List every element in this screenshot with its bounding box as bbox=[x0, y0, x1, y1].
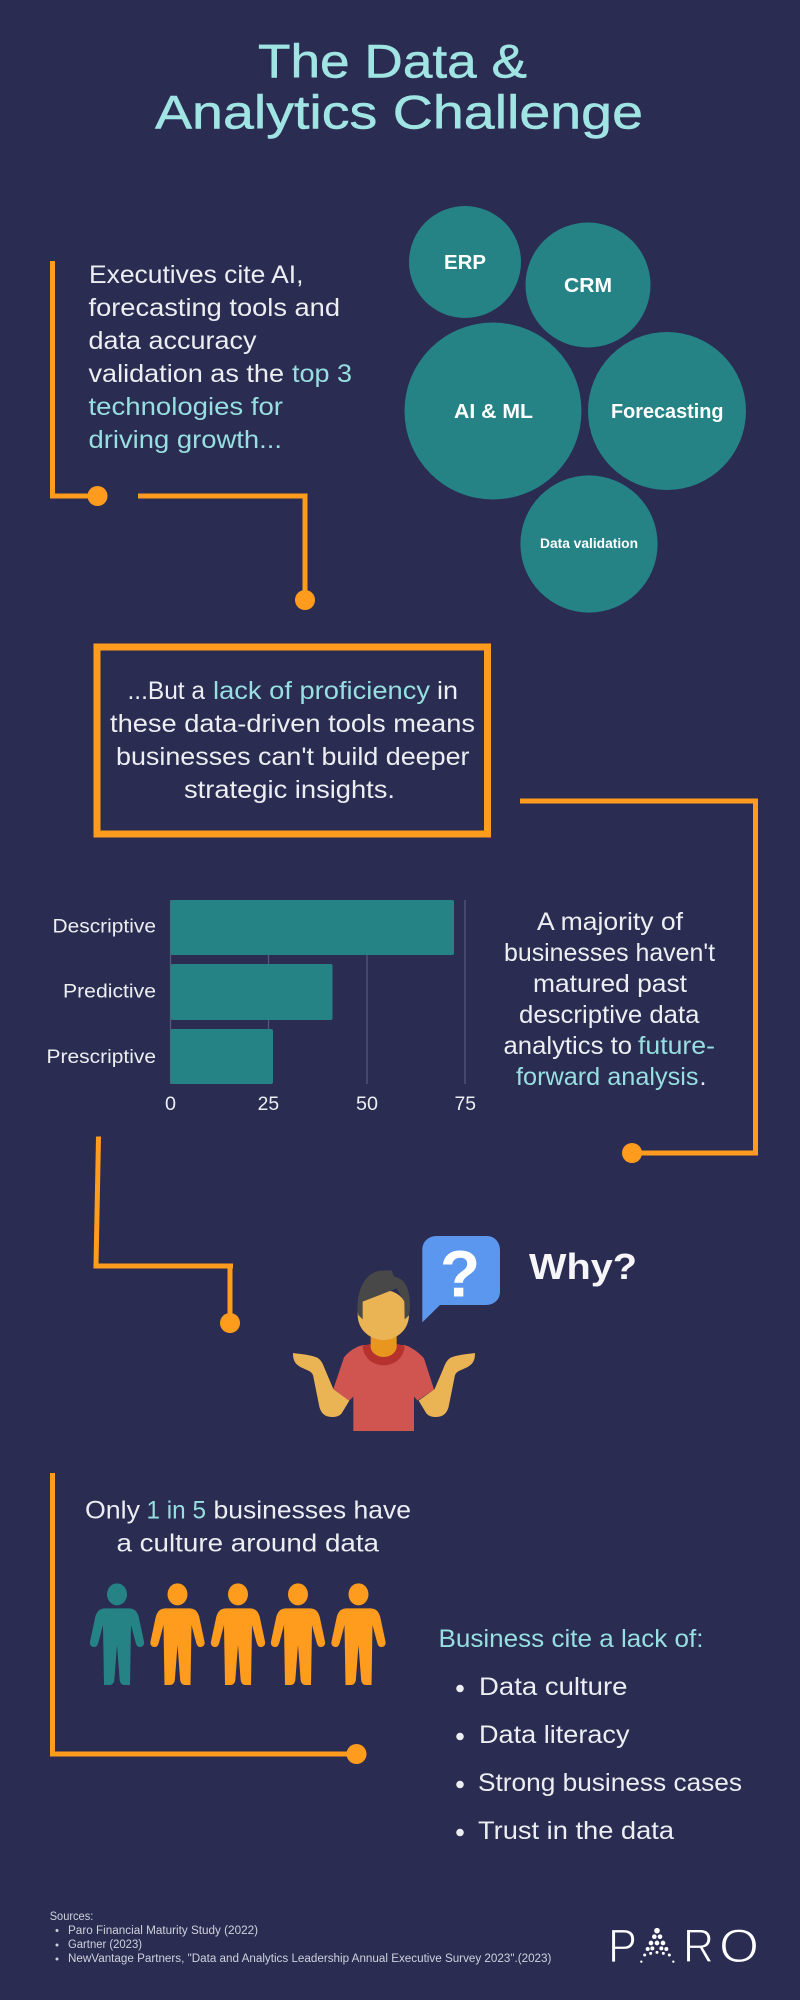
logo: PARO: O bbox=[719, 1919, 759, 1972]
bubble: Data validation: Data validation bbox=[540, 535, 638, 551]
text block: executives cite: data accuracy bbox=[88, 327, 257, 355]
bubble: Data validation bbox=[520, 475, 658, 613]
text block: majority of businesses: . bbox=[700, 1063, 706, 1091]
icon: collar bbox=[363, 1344, 405, 1365]
bar: Descriptive bbox=[170, 900, 454, 955]
bubble: AI and ML: AI & ML bbox=[454, 401, 533, 423]
callout: lack of proficiency: lack of proficiency bbox=[213, 677, 431, 705]
text block: 1 in 5: 1 in 5 bbox=[146, 1496, 206, 1524]
list: lacks: Trust in the data bbox=[478, 1817, 674, 1845]
icon: person orange bbox=[271, 1583, 325, 1685]
icon: face bbox=[358, 1290, 409, 1340]
axis ticks: 50 bbox=[356, 1094, 378, 1115]
bar: Prescriptive bbox=[170, 1029, 273, 1084]
list: lacks bbox=[456, 1673, 742, 1845]
icon: person orange bbox=[331, 1583, 386, 1685]
text block: 1 in 5: Only bbox=[85, 1496, 141, 1524]
text block: majority of businesses: businesses haven't bbox=[504, 939, 715, 967]
bubble: Forecasting: Forecasting bbox=[611, 401, 724, 423]
category labels: Descriptive bbox=[52, 916, 156, 938]
heading: business cite: Business cite a lack of: bbox=[438, 1625, 704, 1653]
connector: top left bracket with dot bbox=[52, 261, 108, 506]
bubble: ERP: ERP bbox=[444, 252, 486, 274]
axis ticks: 25 bbox=[258, 1094, 279, 1115]
sources: Paro Financial Maturity Study (2022) bbox=[68, 1925, 258, 1937]
callout: lack of proficiency: businesses can't build deeper bbox=[116, 743, 470, 771]
callout: lack of proficiency: strategic insights. bbox=[184, 776, 395, 804]
text block: 1 in 5: businesses have bbox=[214, 1496, 411, 1524]
bubble: AI and ML bbox=[404, 322, 582, 500]
callout: lack of proficiency: these data-driven tools means bbox=[110, 710, 475, 738]
sources: NewVantage Partners, "Data and Analytics Leadership Annual Executive Survey 2023".(2023) bbox=[68, 1953, 552, 1965]
icon: right arm bbox=[419, 1353, 475, 1417]
bubble chart: technologies bbox=[404, 206, 746, 613]
bubble: CRM: CRM bbox=[564, 275, 612, 297]
axis ticks: 75 bbox=[454, 1094, 476, 1115]
logo: PARO bbox=[608, 1919, 759, 1972]
icon: neck bbox=[371, 1333, 397, 1357]
list: lacks: Data literacy bbox=[479, 1721, 630, 1749]
text block: executives cite: driving growth... bbox=[88, 426, 282, 454]
bubble: Forecasting bbox=[588, 332, 746, 490]
icon: hair bbox=[357, 1270, 410, 1319]
icon: person orange bbox=[150, 1583, 205, 1685]
heading: why: Why? bbox=[529, 1246, 637, 1287]
text block: executives cite: forecasting tools and bbox=[88, 294, 340, 322]
sources: Gartner (2023) bbox=[68, 1939, 142, 1951]
icon: person teal bbox=[90, 1583, 144, 1685]
text block: majority of businesses: future- bbox=[638, 1032, 715, 1060]
icon: shrugging person with question bubble bbox=[293, 1236, 500, 1431]
bubble: ERP bbox=[409, 206, 521, 318]
icon: shirt bbox=[333, 1345, 434, 1431]
text block: executives cite: validation as the bbox=[88, 360, 284, 388]
title bbox=[155, 34, 643, 138]
bar chart: analytics maturity bbox=[46, 900, 476, 1115]
callout: lack of proficiency: ...But a bbox=[128, 677, 205, 705]
axis ticks: 0 bbox=[165, 1094, 176, 1115]
icon: speech bubble bbox=[422, 1236, 500, 1322]
text block: majority of businesses: analytics to bbox=[504, 1032, 632, 1060]
logo: PARO: R bbox=[683, 1919, 714, 1972]
icon: person orange bbox=[211, 1583, 265, 1685]
icon: question mark: ? bbox=[440, 1236, 480, 1310]
text block: executives cite bbox=[88, 261, 352, 454]
logo: PARO: P bbox=[608, 1919, 637, 1972]
text block: executives cite: top 3 bbox=[292, 360, 352, 388]
text block: executives cite: technologies for bbox=[88, 393, 283, 421]
category labels: Predictive bbox=[63, 982, 156, 1002]
text block: majority of businesses bbox=[504, 908, 715, 1091]
icon: left arm bbox=[293, 1353, 349, 1417]
title: Analytics Challenge bbox=[155, 86, 643, 138]
text block: majority of businesses: A majority of bbox=[537, 908, 683, 936]
callout: lack of proficiency: in bbox=[437, 677, 458, 705]
text block: majority of businesses: descriptive data bbox=[519, 1001, 700, 1029]
text block: majority of businesses: forward analysis bbox=[516, 1063, 698, 1091]
connector: right bracket with dot bbox=[520, 801, 756, 1163]
list: lacks: Strong business cases bbox=[478, 1769, 742, 1797]
category labels: Prescriptive bbox=[46, 1047, 156, 1068]
pictogram: 1 in 5 people bbox=[90, 1583, 386, 1685]
connector: lower left bracket with dot bbox=[96, 1136, 240, 1333]
sources: Sources: bbox=[50, 1911, 93, 1923]
list: lacks: Data culture bbox=[479, 1673, 628, 1701]
title: The Data & bbox=[258, 34, 527, 88]
axis ticks bbox=[165, 1094, 476, 1115]
sources bbox=[50, 1911, 552, 1965]
text block: 1 in 5: a culture around data bbox=[116, 1530, 379, 1558]
connector: bottom left bracket with dot bbox=[52, 1473, 366, 1764]
text block: 1 in 5 bbox=[85, 1496, 411, 1558]
bubble: CRM bbox=[526, 222, 650, 348]
text block: executives cite: Executives cite AI, bbox=[89, 261, 304, 289]
bar: Predictive bbox=[170, 964, 332, 1020]
category labels bbox=[46, 916, 156, 1068]
connector: bracket down to box with dot bbox=[138, 496, 315, 610]
text block: majority of businesses: matured past bbox=[533, 970, 687, 998]
callout: lack of proficiency bbox=[97, 647, 488, 834]
